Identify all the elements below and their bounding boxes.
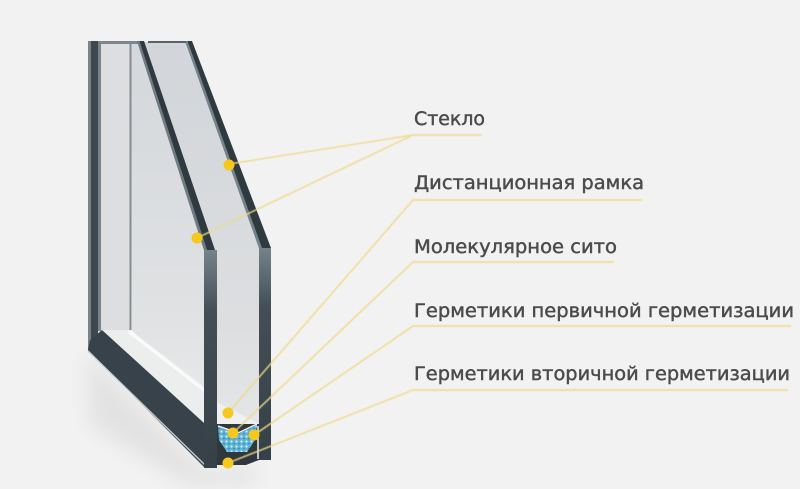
dot: spacer frame bbox=[222, 408, 234, 418]
line: molecular sieve bbox=[233, 262, 614, 433]
dot: molecular sieve bbox=[228, 428, 238, 438]
front frame bbox=[88, 41, 207, 468]
line: glass 2 bbox=[197, 135, 413, 238]
window unit illustration bbox=[88, 41, 271, 468]
line: glass bbox=[229, 135, 482, 164]
label: secondary sealant: Герметики вторичной герметизации bbox=[414, 363, 790, 385]
line: secondary sealant bbox=[228, 390, 788, 463]
label: primary sealant: Герметики первичной герметизации bbox=[414, 300, 794, 322]
dot: secondary sealant bbox=[222, 458, 234, 468]
floor shadow bbox=[86, 352, 262, 486]
front glass pane bbox=[137, 41, 217, 468]
marker dots bbox=[192, 160, 260, 468]
label: molecular sieve: Молекулярное сито bbox=[414, 236, 617, 258]
label: glass: Стекло bbox=[414, 108, 485, 130]
line: primary sealant bbox=[254, 326, 791, 435]
dot: glass bbox=[224, 160, 234, 170]
leader lines bbox=[197, 135, 791, 463]
dot: glass 2 bbox=[192, 232, 202, 244]
label: spacer frame: Дистанционная рамка bbox=[414, 172, 644, 194]
front glass and frame interior bbox=[98, 41, 204, 423]
line: spacer frame bbox=[228, 200, 642, 413]
rear glass pane bbox=[142, 41, 271, 460]
dot: primary sealant bbox=[248, 430, 260, 440]
sealed edge with sieve bbox=[217, 402, 259, 465]
